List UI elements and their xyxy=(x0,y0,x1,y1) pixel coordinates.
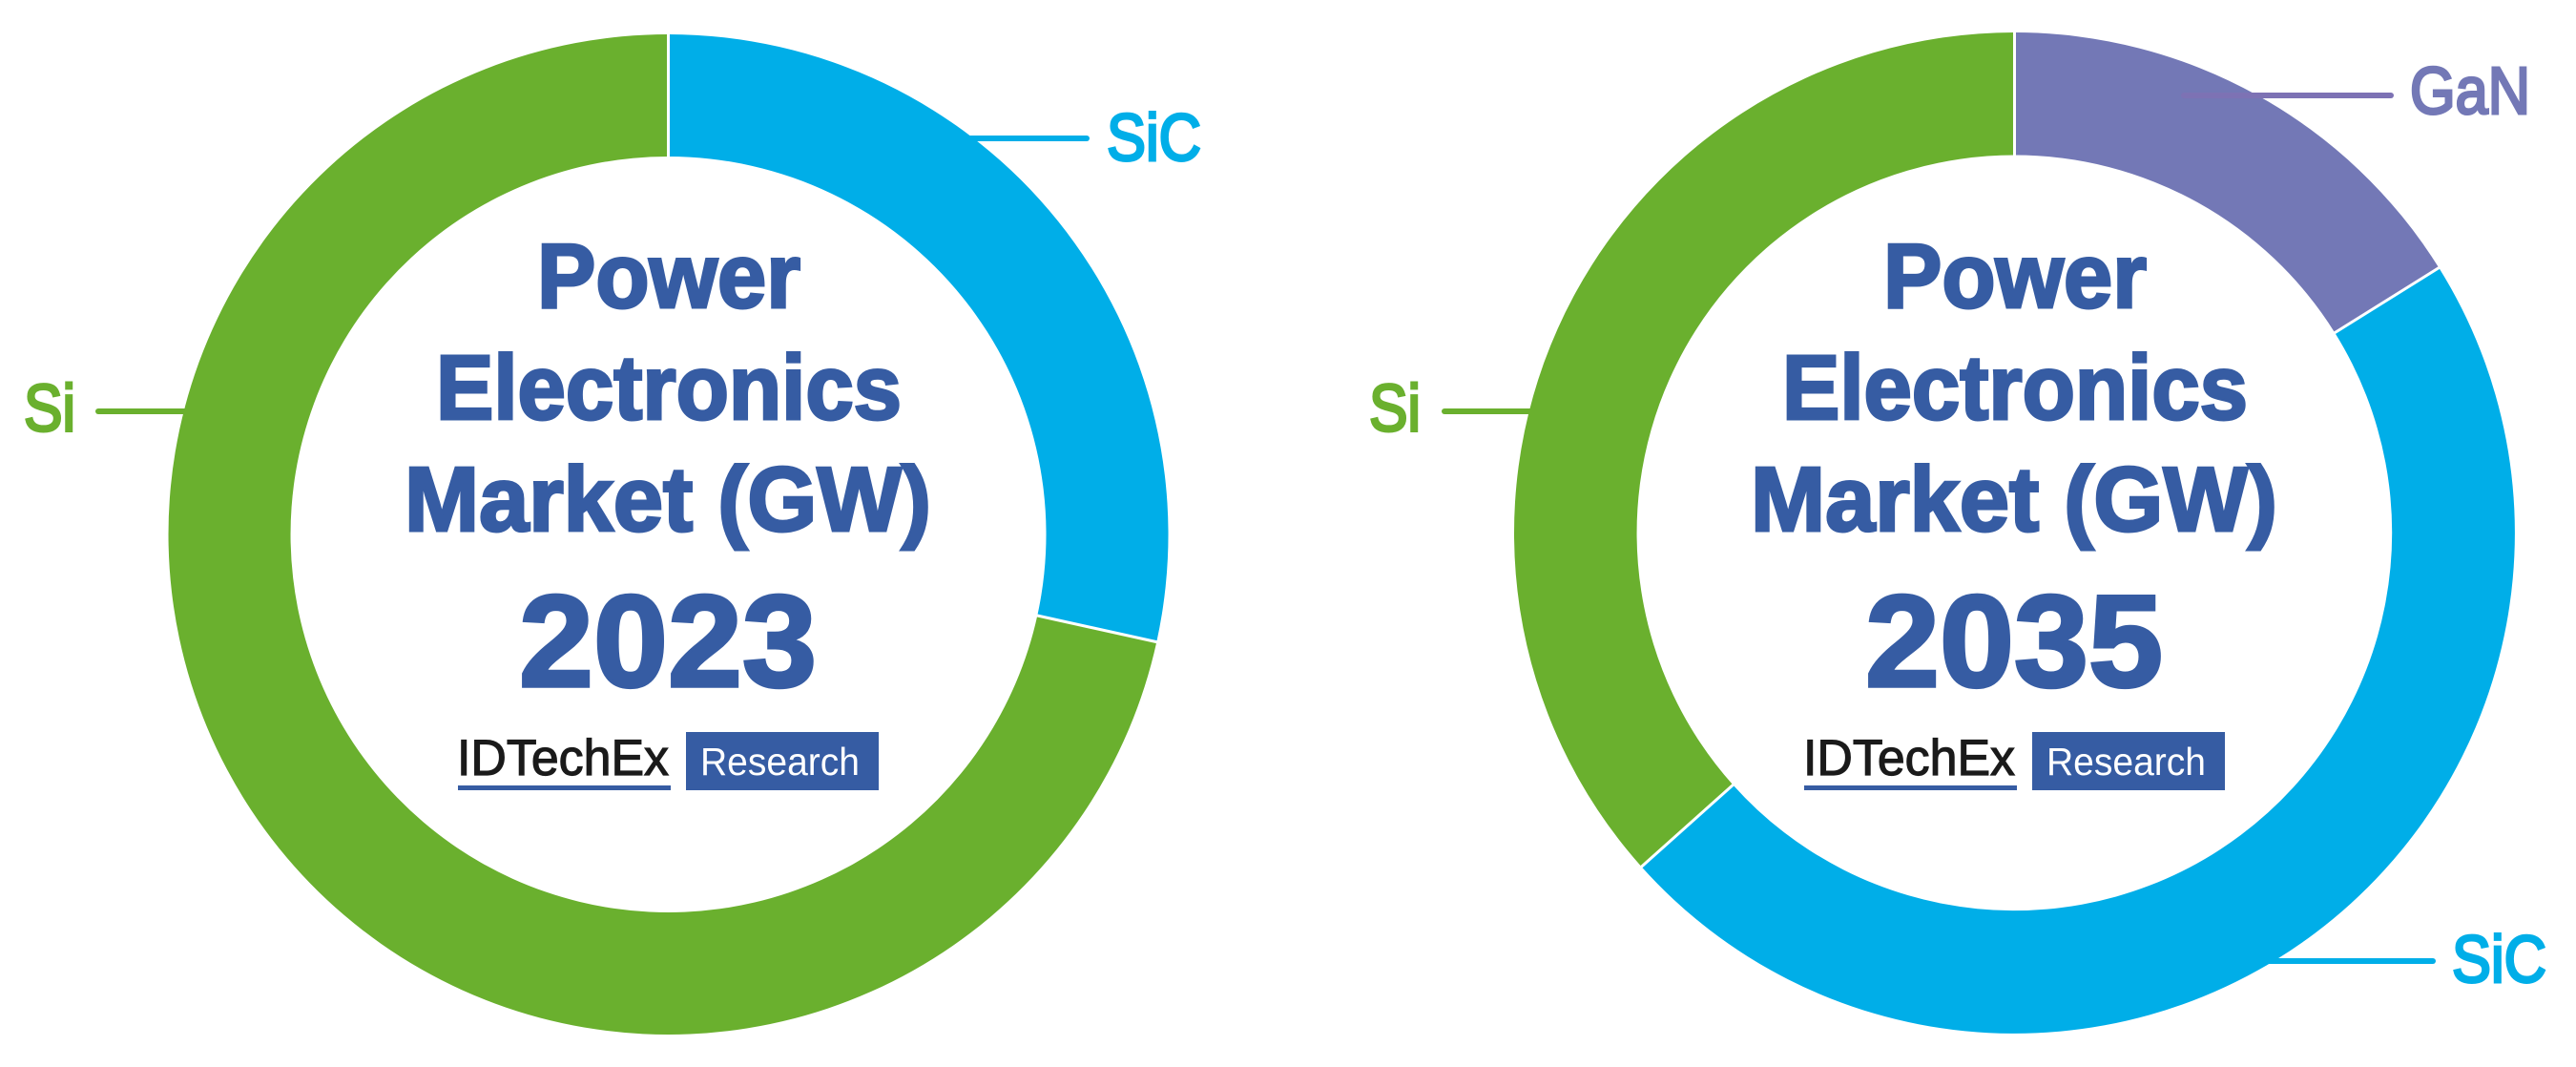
heading: Power Electronics Market (GW) xyxy=(1751,225,2277,551)
year: 2035: 2035 xyxy=(1865,569,2163,715)
segment: Si 2035 xyxy=(1514,32,2015,867)
logo: IDTechEx Research xyxy=(457,730,879,790)
year: 2023: 2023 xyxy=(519,569,817,715)
logo: IDTechEx Research: IDTechEx xyxy=(457,730,669,786)
heading: Power Electronics Market (GW): Market (GW) xyxy=(405,449,931,551)
label: GaN 2035: GaN xyxy=(2410,53,2530,128)
label: Si 2023: Si xyxy=(24,370,75,445)
logo: IDTechEx Research: Research xyxy=(700,740,860,784)
panel: 2035 donut chart xyxy=(1369,31,2546,1034)
logo: IDTechEx Research: IDTechEx xyxy=(1803,730,2015,786)
segment: SiC 2023 xyxy=(668,34,1169,641)
heading: Power Electronics Market (GW): Electronics xyxy=(436,337,902,439)
label: Si 2035: Si xyxy=(1369,370,1421,445)
segment: GaN 2035 xyxy=(2015,32,2439,333)
segment: SiC 2035 xyxy=(1641,268,2515,1034)
heading: Power Electronics Market (GW): Power xyxy=(1883,225,2147,327)
segment: Si 2023 xyxy=(169,34,1156,1035)
label: SiC 2035: SiC xyxy=(2452,922,2546,996)
heading: Power Electronics Market (GW): Power xyxy=(537,225,800,327)
heading: Power Electronics Market (GW): Market (GW) xyxy=(1751,449,2277,551)
logo: IDTechEx Research xyxy=(1803,730,2225,790)
logo: IDTechEx Research: Research xyxy=(2046,740,2206,784)
label: SiC 2023: SiC xyxy=(1107,100,1201,175)
heading: Power Electronics Market (GW) xyxy=(405,225,931,551)
heading: Power Electronics Market (GW): Electronics xyxy=(1782,337,2248,439)
panel: 2023 donut chart xyxy=(24,32,1201,1035)
